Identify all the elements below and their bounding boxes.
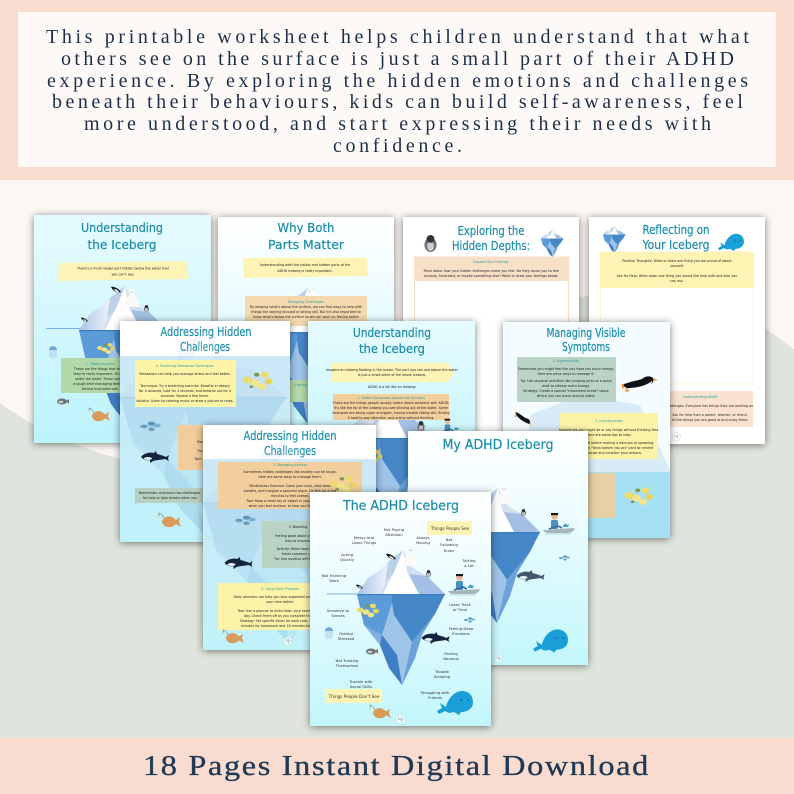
card: Addressing Hidden Challenges (front): your time better. bbox=[266, 600, 294, 604]
hidden labels: Sensitive to bbox=[327, 608, 350, 613]
intro text panel: beneath their behaviours, kids can build self-awareness, feel bbox=[52, 91, 743, 113]
sticker: Things People Don't See bbox=[325, 689, 382, 703]
card: Understanding the Iceberg (center): Imagine an iceberg floating in the ocean. The part you can see above the water bbox=[326, 368, 459, 372]
card: Understanding the Iceberg (back): These are the things that might bbox=[73, 367, 127, 371]
hidden labels: Themselves bbox=[335, 663, 358, 668]
card: Understanding the Iceberg (back): There's a much larger part hidden below the water that bbox=[76, 266, 170, 270]
hidden labels: Not Trusting bbox=[336, 658, 359, 663]
card: Addressing Hidden Challenges (front) bbox=[203, 425, 376, 650]
card: Addressing Hidden Challenges (front): Mindfulness Exercise: Close your eyes, take deep bbox=[249, 484, 331, 488]
card: Managing Visible Symptoms: you to pause and consider your actions. bbox=[576, 451, 642, 455]
sticker: Things People See: Things People See bbox=[430, 526, 470, 531]
card: Reflecting on Your Iceberg: Positive Thoughts: Write or draw one thing you are proud of about bbox=[622, 259, 732, 263]
card: Exploring the Hidden Depths: Hidden Depths: bbox=[452, 239, 530, 253]
card: Addressing Hidden Challenges (front): 3. Using Daily Planners bbox=[261, 587, 299, 591]
card: Reflecting on Your Iceberg: Understanding ADHD bbox=[682, 395, 718, 399]
sage wave background bbox=[0, 294, 794, 738]
hidden labels: Emotions bbox=[452, 631, 470, 636]
card: Why Both Parts Matter: know what's below the surface so we can work on feeling better bbox=[253, 315, 360, 319]
card: Addressing Hidden Challenges (back): Technique: Try a breathing exercise. Breathe in deeply bbox=[139, 384, 230, 388]
card: Addressing Hidden Challenges (back) bbox=[120, 321, 290, 542]
card: Addressing Hidden Challenges (back): Tool: Breathe bbox=[193, 457, 216, 461]
hidden labels bbox=[327, 602, 474, 700]
card: Understanding the Iceberg (back): you can't see. bbox=[111, 272, 135, 276]
card: Reflecting on Your Iceberg: can ask. bbox=[670, 279, 684, 283]
card: Managing Visible Symptoms bbox=[503, 322, 670, 538]
card: Understanding the Iceberg (center): 1. Visible Symptoms (Above the Surface) bbox=[357, 396, 425, 400]
card: Managing Visible Symptoms: Sometimes you might feel like you have too much energy. bbox=[518, 367, 614, 371]
card: Addressing Hidden Challenges (front): Tool: Use a planner to write down your tasks for the bbox=[236, 609, 323, 613]
sticker: Things People Don't See: Things People Don't See bbox=[328, 694, 380, 699]
card: Reflecting on Your Iceberg: yourself. bbox=[670, 264, 684, 268]
visible labels: Always bbox=[416, 535, 430, 540]
top band bbox=[0, 0, 794, 180]
card: Addressing Hidden Challenges (front): breaths, and imagine a peaceful place. Do this for a few bbox=[244, 489, 337, 493]
card: Managing Visible Symptoms: 2. Impulsiveness bbox=[595, 419, 623, 423]
card: Addressing Hidden Challenges (front): Tip: Use positive affirmations bbox=[273, 557, 322, 561]
card: Understanding the Iceberg (center) bbox=[308, 321, 475, 529]
card: My ADHD Iceberg: My ADHD Iceberg bbox=[442, 438, 554, 453]
bottom caption: 18 Pages Instant Digital Download bbox=[143, 750, 650, 782]
card: Understanding the Iceberg (back): under the water. These can be bbox=[75, 377, 125, 381]
card: Addressing Hidden Challenges (front): Sometimes hidden challenges like anxiety can be tough. bbox=[243, 470, 337, 474]
card: Understanding the Iceberg (center): Understanding bbox=[353, 326, 431, 340]
hidden labels: Feeling bbox=[444, 651, 458, 656]
card: Why Both Parts Matter: Parts Matter bbox=[268, 238, 344, 252]
card: Understanding the Iceberg (center): it hard to pay attention, and acting without thinking. bbox=[348, 416, 434, 420]
card: Why Both Parts Matter bbox=[218, 217, 394, 442]
visible labels: Acting bbox=[341, 552, 354, 557]
visible labels: Not bbox=[446, 537, 453, 542]
card: Why Both Parts Matter: Managing Challenges: bbox=[288, 300, 324, 304]
card: Addressing Hidden Challenges (back): Relaxation can help you manage stress and feel better. bbox=[139, 372, 231, 376]
card: Addressing Hidden Challenges (front): 2. Boosting bbox=[289, 525, 307, 529]
card: Reflecting on Your Iceberg: Ask for help from a parent, teacher, or friend. bbox=[672, 413, 748, 417]
card: Addressing Hidden Challenges (back): Tip: Use a bbox=[196, 449, 213, 453]
visible labels: Attention bbox=[385, 532, 403, 537]
card: Managing Visible Symptoms: Strategy: Create a special "movement break" space bbox=[523, 389, 609, 393]
card: Addressing Hidden Challenges (back): Addressing Hidden bbox=[160, 325, 252, 339]
card: Reflecting on Your Iceberg: Ask for Help: Write down one thing you would like help with and who you bbox=[617, 274, 737, 278]
card: Addressing Hidden Challenges (front): Daily planners can help you stay organized and manage bbox=[233, 595, 327, 599]
card: Why Both Parts Matter: By keeping what's above the surface, we can find ways to help with bbox=[250, 305, 362, 309]
card: Addressing Hidden Challenges (front): day. Check them off as you complete them. bbox=[244, 614, 316, 618]
card: Exploring the Hidden Depths: anxious, frustrated, or maybe something else? Write or draw your feelings below. bbox=[424, 274, 558, 278]
hidden labels: Social Skills bbox=[350, 684, 372, 689]
card: Understanding the Iceberg (center): It's like the tip of the iceberg you see sticking out of the water. Some bbox=[334, 406, 448, 410]
card: Exploring the Hidden Depths bbox=[403, 217, 579, 443]
card: Exploring the Hidden Depths: Think about how your hidden challenges make you feel. Do they cause you to feel bbox=[422, 269, 559, 273]
intro text panel: confidence. bbox=[333, 135, 462, 157]
card: Addressing Hidden Challenges (front): how to improve bbox=[285, 539, 311, 543]
icon: small penguin bbox=[426, 570, 431, 577]
hidden labels: Senses bbox=[331, 613, 345, 618]
hidden labels: Feeling Deep bbox=[449, 626, 474, 631]
card: Addressing Hidden Challenges (front): minutes to feel calmer. bbox=[271, 494, 309, 498]
card: The ADHD Iceberg (front) bbox=[310, 492, 491, 726]
card: Managing Visible Symptoms: Tip: Count to 10 before making a decision or speaking. bbox=[563, 441, 654, 445]
card: Addressing Hidden Challenges (back): 4. Practicing Relaxation Techniques bbox=[156, 364, 214, 368]
card: Managing Visible Symptoms: where you can move around safely. bbox=[537, 394, 595, 398]
card: Addressing Hidden Challenges (front): Challenges bbox=[264, 444, 316, 458]
intro text panel: This printable worksheet helps children understand that what bbox=[46, 26, 749, 48]
card: Managing Visible Symptoms: walk to release extra energy. bbox=[542, 384, 590, 388]
card: Addressing Hidden Challenges (front): Feeling good about yourself bbox=[275, 534, 322, 538]
card: Understanding the Iceberg (back): 1. Visible Impacts bbox=[85, 362, 115, 366]
icon: sliding penguin bbox=[356, 585, 363, 588]
visible labels: Quickly bbox=[340, 557, 355, 562]
card: Understanding the Iceberg (back): feeling frustrated with bbox=[82, 387, 118, 391]
card: Reflecting on Your Iceberg: Reflecting on bbox=[642, 223, 710, 237]
hidden labels: Friends bbox=[428, 695, 442, 700]
card: Addressing Hidden Challenges (front): Addressing Hidden bbox=[244, 429, 336, 443]
card: Why Both Parts Matter: Understanding both the visible and hidden parts of the bbox=[260, 263, 350, 267]
card: Managing Visible Symptoms: Symptoms bbox=[562, 340, 610, 354]
intro text panel bbox=[18, 12, 776, 167]
card: Addressing Hidden Challenges (back): seconds. Repeat a few times. bbox=[161, 394, 209, 398]
title: The ADHD Iceberg: The ADHD Iceberg bbox=[342, 499, 459, 514]
visible labels: Moving bbox=[416, 540, 430, 545]
card: Understanding the Iceberg (center): the Iceberg bbox=[359, 342, 425, 356]
bottom band bbox=[0, 738, 794, 794]
icon: penguin on ice bbox=[386, 554, 396, 559]
hidden labels: Nervous bbox=[443, 656, 459, 661]
card: Addressing Hidden Challenges (front): when you feel anxious, to help you feel grounded. bbox=[249, 504, 331, 508]
hidden labels: Loses Track bbox=[449, 602, 472, 607]
card: Why Both Parts Matter: ADHD iceberg is really important. bbox=[277, 269, 333, 273]
hidden labels: Trouble with bbox=[348, 679, 373, 684]
icon: blue fish bbox=[464, 617, 475, 622]
visible labels: Not Finishing bbox=[322, 573, 347, 578]
hidden labels: of Time bbox=[453, 607, 468, 612]
card: Reflecting on Your Iceberg: all the things you are good at and enjoy them. bbox=[672, 418, 748, 422]
card: Understanding the Iceberg (back): Understanding bbox=[81, 221, 163, 235]
card: Managing Visible Symptoms: Here are some ways to manage it: bbox=[538, 372, 594, 376]
card: Addressing Hidden Challenges (front): Tool: Keep a small toy or object in your pocket to use bbox=[245, 499, 334, 503]
card: Understanding the Iceberg (center): These are the things people usually notice about someone with ADHD. bbox=[332, 401, 449, 405]
card: Understanding the Iceberg (center): ADHD is a bit like an iceberg: bbox=[368, 385, 416, 389]
icon: jellyfish bbox=[325, 627, 333, 639]
card: Addressing Hidden Challenges (back): Remember: everyone has challenges, bbox=[139, 491, 201, 495]
hidden labels: Sleeping bbox=[434, 674, 451, 679]
visible labels: Loses Things bbox=[352, 540, 376, 545]
visible labels: Not Paying bbox=[384, 527, 405, 532]
visible labels: Rules bbox=[444, 548, 454, 553]
card: Why Both Parts Matter: things like staying focused or sitting still. But it's also important to bbox=[251, 310, 361, 314]
card: Understanding the Iceberg (back) bbox=[34, 215, 211, 443]
intro text panel: experience. By exploring the hidden emotions and challenges bbox=[47, 70, 748, 92]
card: Addressing Hidden Challenges (front): 1. Managing Anxiety bbox=[273, 463, 307, 467]
card: Addressing Hidden Challenges (back): for help or take breaks when you bbox=[143, 496, 197, 500]
card: Understanding the Iceberg (back): they're really important. It's like bbox=[74, 372, 126, 376]
icon: orca bbox=[422, 632, 450, 644]
card: Addressing Hidden Challenges (back): for 4 seconds, hold for 4 seconds, and breathe out for 4 bbox=[139, 389, 231, 393]
card: Managing Visible Symptoms: 1. Hyperactivity bbox=[553, 359, 579, 363]
card: Addressing Hidden Challenges (front): Activity: Write down three bbox=[277, 547, 319, 551]
card: Managing Visible Symptoms: Managing Visible bbox=[546, 326, 626, 340]
card: Reflecting on Your Iceberg: challenges. Everyone has things they are working on. bbox=[666, 404, 754, 408]
icon: child in kayak bbox=[448, 574, 480, 595]
hidden labels: Stressed bbox=[338, 636, 355, 641]
card: Addressing Hidden Challenges (front): Strategy: Set specific times for each task, like 30 bbox=[240, 619, 320, 623]
card: Reflecting on Your Iceberg bbox=[589, 217, 765, 444]
visible labels: a Lot bbox=[464, 563, 474, 568]
card: My ADHD Iceberg bbox=[408, 431, 588, 665]
card: Understanding the Iceberg (center): is just a small piece of the whole iceberg. bbox=[358, 373, 426, 377]
card: Understanding the Iceberg (back): a tough time managing feelings, bbox=[73, 382, 127, 386]
iceberg illustration bbox=[357, 550, 445, 685]
card: Addressing Hidden Challenges (front): Here are some ways to manage them: bbox=[258, 475, 322, 479]
visible labels: Messy and bbox=[354, 535, 375, 540]
icon: grey fish bbox=[366, 648, 378, 654]
visible labels: Work bbox=[329, 578, 340, 583]
sticker: Things People See bbox=[427, 521, 472, 535]
icon: whale bbox=[437, 691, 473, 715]
icon: polar bear bbox=[403, 547, 418, 566]
card: Understanding the Iceberg (back): the Iceberg bbox=[88, 238, 156, 252]
card: Addressing Hidden Challenges (back): Challenges bbox=[180, 340, 230, 354]
card: Addressing Hidden Challenges (front): times someone you bbox=[282, 552, 314, 556]
icon: yellow fish school bbox=[356, 604, 379, 617]
hidden labels: Trouble bbox=[434, 669, 450, 674]
card: Exploring the Hidden Depths: Exploring the bbox=[458, 224, 524, 238]
card: Managing Visible Symptoms: Strategy: Use a "think before you act" card to remind bbox=[565, 446, 653, 450]
card: Addressing Hidden Challenges (back): Activity: Listen to calming music or draw a picture to relax. bbox=[136, 399, 234, 403]
card: Understanding the Iceberg (center): examples are being super energetic, having trouble sitting still, finding bbox=[332, 411, 450, 415]
card: Why Both Parts Matter: Why Both bbox=[278, 221, 334, 235]
hidden labels: Feeling bbox=[339, 631, 353, 636]
card: Managing Visible Symptoms: Here are some tips to help: bbox=[587, 433, 631, 437]
card: Managing Visible Symptoms: Sometimes you might do or say things without thinking first. bbox=[559, 428, 659, 432]
icon: anglerfish bbox=[369, 705, 391, 718]
visible labels bbox=[322, 527, 476, 583]
visible labels: Talking bbox=[461, 558, 476, 563]
card: Addressing Hidden Challenges (front): minutes for homework and 10 minutes for play. bbox=[241, 624, 319, 628]
intro text panel: others see on the surface is just a small part of their ADHD bbox=[61, 48, 734, 70]
card: Why Both Parts Matter: Feeling Good bbox=[295, 383, 317, 387]
intro text panel: more understood, and start expressing their needs with bbox=[84, 113, 711, 135]
card: Reflecting on Your Iceberg: Your Iceberg bbox=[642, 238, 710, 252]
card: Managing Visible Symptoms: Tip: Use physical activities like jumping jacks or a quick bbox=[519, 379, 612, 383]
hidden labels: Struggling with bbox=[421, 690, 450, 695]
card: Addressing Hidden Challenges (back): Managing bbox=[197, 440, 213, 444]
icon: logo bbox=[395, 714, 406, 725]
card: Exploring the Hidden Depths: Explore Your Feelings bbox=[473, 260, 509, 264]
visible labels: Following bbox=[440, 542, 458, 547]
